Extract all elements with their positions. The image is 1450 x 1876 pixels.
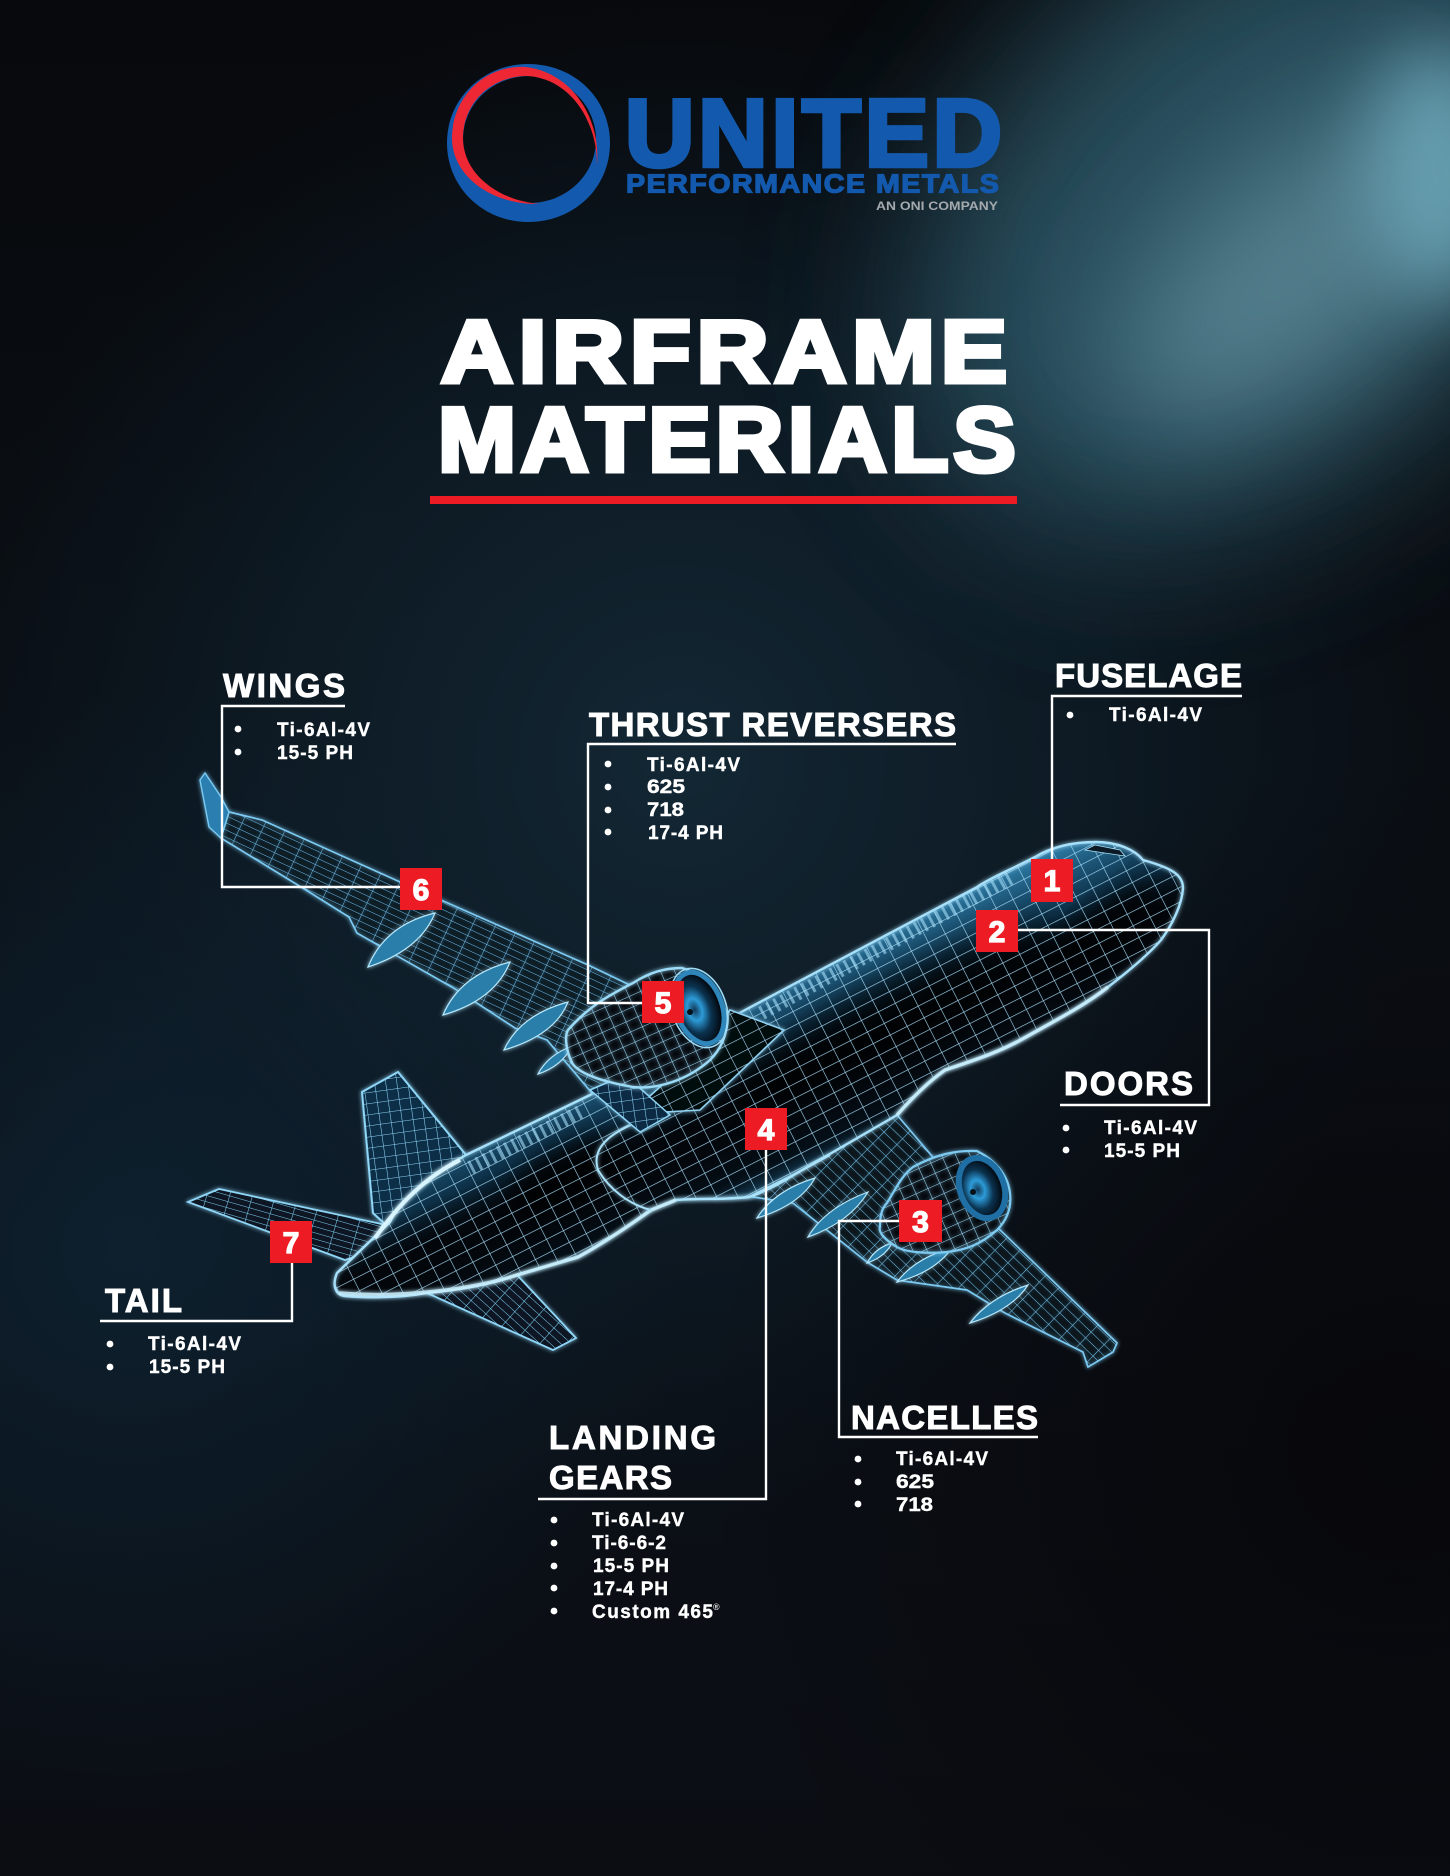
materials list: landing gears: 17-4 PH <box>593 1579 668 1600</box>
number badge 2: 2 <box>989 916 1005 949</box>
callout 7: tail <box>100 1221 312 1378</box>
heading: fuselage: FUSELAGE <box>1055 657 1242 694</box>
number badge 7 <box>270 1221 312 1263</box>
fuselage outline <box>335 842 1183 1297</box>
callout 3: nacelles <box>839 1200 1038 1516</box>
logo wordmark: UNITED <box>625 80 1002 187</box>
materials list: doors: Ti-6Al-4V <box>1104 1118 1197 1139</box>
horizontal stabilizer, far <box>188 1189 400 1260</box>
materials list: doors: 15-5 PH <box>1104 1141 1180 1162</box>
vertical tail fin <box>362 1072 466 1225</box>
materials list: tail <box>107 1334 241 1378</box>
title: AIRFRAME <box>441 302 1007 401</box>
title red underline <box>430 496 1017 504</box>
logo subtitle: PERFORMANCE METALS <box>626 169 999 198</box>
near engine <box>880 1151 1013 1253</box>
number badge 6 <box>400 868 442 910</box>
logo: United Performance Metals <box>447 64 1002 222</box>
far wing <box>200 773 700 1110</box>
materials list: nacelles: Ti-6Al-4V <box>896 1449 988 1470</box>
number badge 7: 7 <box>283 1227 299 1260</box>
materials list: landing gears: 15-5 PH <box>593 1556 669 1577</box>
belly fairing <box>597 1117 830 1210</box>
materials list: landing gears: Custom 465 <box>592 1602 713 1623</box>
number badge 4 <box>745 1108 787 1150</box>
materials list: landing gears: ® <box>713 1602 720 1612</box>
materials list: tail: 15-5 PH <box>149 1357 225 1378</box>
number badge 6: 6 <box>413 874 429 907</box>
title: MATERIALS <box>438 388 1016 491</box>
number badge 5: 5 <box>655 987 671 1020</box>
callout 4: landing gears <box>538 1108 787 1623</box>
heading: tail: TAIL <box>105 1282 182 1319</box>
bright lower edge highlight <box>339 987 1108 1294</box>
materials list: landing gears: Ti-6Al-4V <box>592 1510 684 1531</box>
materials list: nacelles: 625 <box>896 1472 935 1493</box>
fuselage mesh <box>320 830 1200 1310</box>
near wing <box>740 1115 1117 1367</box>
materials list: thrust reversers: 718 <box>647 800 684 821</box>
callout 1: fuselage <box>1031 657 1242 902</box>
number badge 4: 4 <box>758 1114 775 1147</box>
heading: landing gears <box>549 1419 716 1496</box>
materials list: wings <box>235 720 370 764</box>
horizontal stabilizer, near <box>427 1275 576 1350</box>
materials list: landing gears: Ti-6-6-2 <box>592 1533 666 1554</box>
number badge 2 <box>976 910 1018 952</box>
wireframe airplane <box>188 773 1200 1367</box>
logo tagline: AN ONI COMPANY <box>876 201 998 213</box>
heading: doors: DOORS <box>1064 1065 1193 1102</box>
materials list: fuselage: Ti-6Al-4V <box>1109 705 1202 726</box>
icon: blue and red swirl ring <box>447 64 610 222</box>
materials list: thrust reversers <box>605 755 740 844</box>
materials list: doors <box>1063 1118 1197 1162</box>
materials list: fuselage <box>1067 705 1202 726</box>
heading: wings: WINGS <box>223 667 345 704</box>
heading: landing gears: LANDING <box>549 1419 716 1456</box>
materials list: nacelles <box>855 1449 988 1516</box>
window strip along fuselage crown <box>470 878 1010 1168</box>
materials list: thrust reversers: 625 <box>647 777 686 798</box>
far wing root <box>590 1010 784 1132</box>
materials list: wings: Ti-6Al-4V <box>277 720 370 741</box>
materials list: landing gears <box>551 1510 720 1623</box>
callout 6: wings <box>222 667 442 910</box>
callout 2: doors <box>976 910 1209 1162</box>
materials list: nacelles: 718 <box>896 1495 933 1516</box>
materials list: thrust reversers: Ti-6Al-4V <box>647 755 740 776</box>
number badge 3: 3 <box>912 1206 929 1239</box>
materials list: thrust reversers: 17-4 PH <box>648 823 723 844</box>
materials list: tail: Ti-6Al-4V <box>148 1334 241 1355</box>
materials list: wings: 15-5 PH <box>277 743 353 764</box>
fuselage <box>320 830 1200 1310</box>
number badge 1: 1 <box>1044 865 1060 898</box>
callout 5: thrust reversers <box>588 706 956 1023</box>
heading: thrust reversers: THRUST REVERSERS <box>589 706 956 743</box>
far engine <box>566 960 738 1087</box>
dark underside shadows <box>497 866 1172 1230</box>
number badge 5 <box>642 981 684 1023</box>
title <box>438 302 1016 491</box>
heading: nacelles: NACELLES <box>851 1399 1038 1436</box>
cockpit windows <box>1085 845 1125 856</box>
number badge 1 <box>1031 859 1073 902</box>
number badge 3 <box>899 1200 942 1242</box>
heading: landing gears: GEARS <box>549 1459 672 1496</box>
